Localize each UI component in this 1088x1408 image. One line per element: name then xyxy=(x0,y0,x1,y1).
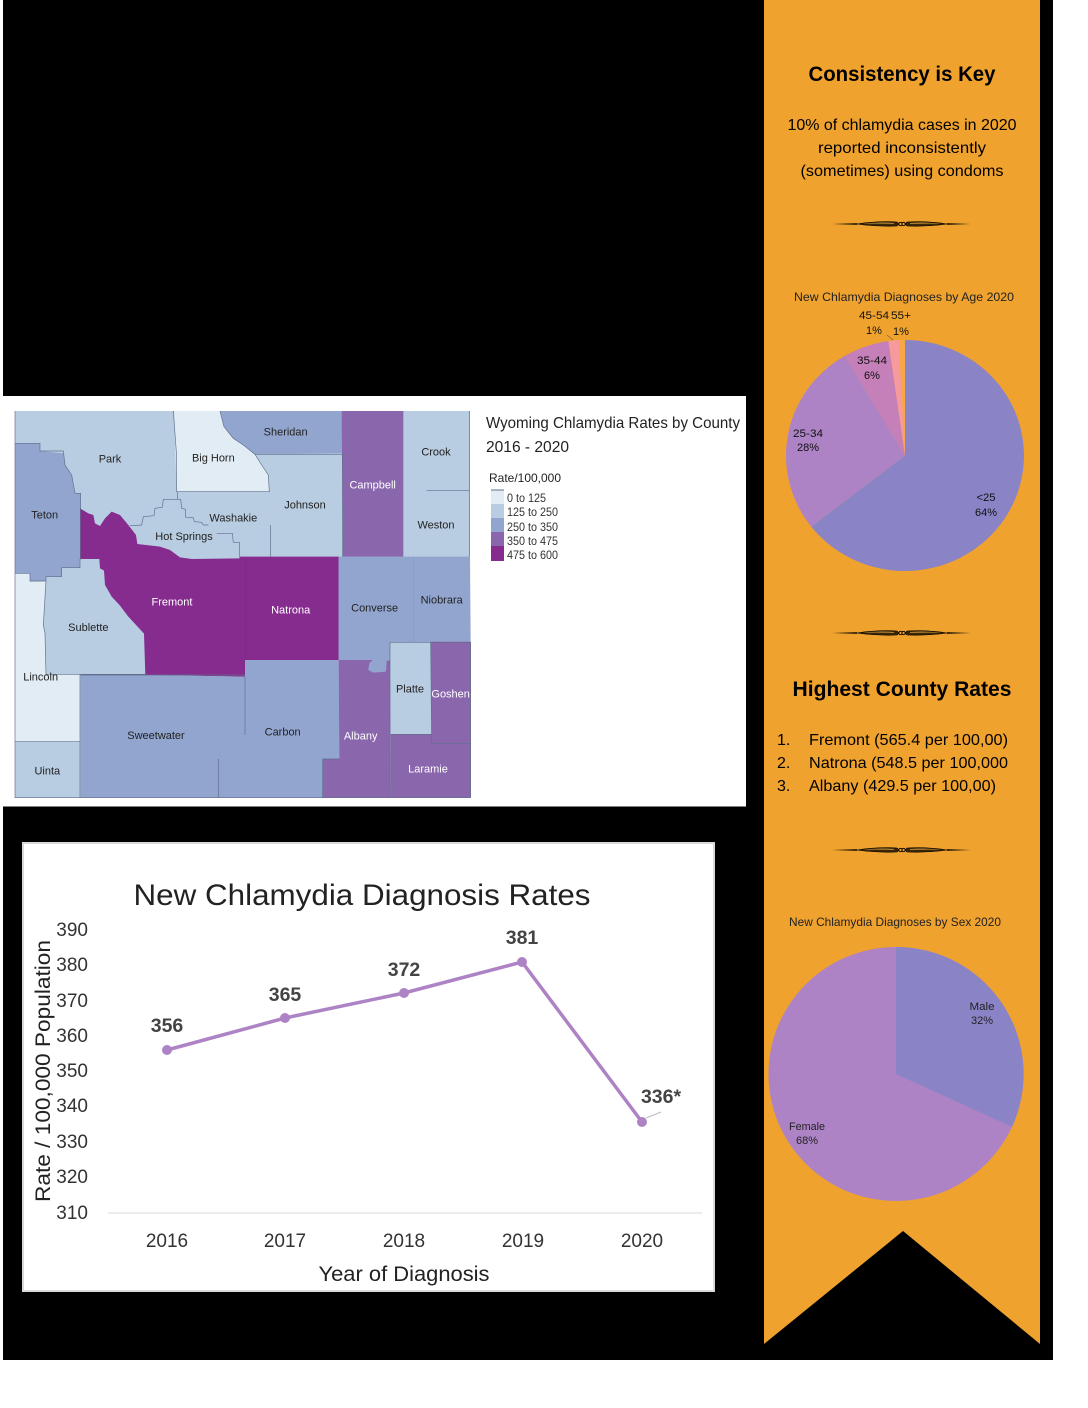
pie chart: diagnoses by age xyxy=(786,290,1024,571)
pie chart: diagnoses by age: 45-54 xyxy=(859,310,889,322)
x axis ticks: 2019 xyxy=(502,1231,544,1252)
county labels: Lincoln xyxy=(23,672,58,684)
county labels: Laramie xyxy=(408,763,448,775)
county labels: Big Horn xyxy=(192,453,235,465)
list: highest county rates: Albany (429.5 per 100,00) xyxy=(809,778,996,795)
map legend: 350 to 475 xyxy=(507,534,558,548)
x axis ticks: 2020 xyxy=(621,1231,663,1252)
x axis ticks: 2018 xyxy=(383,1231,425,1252)
y axis ticks: 360 xyxy=(56,1026,88,1047)
county labels: Park xyxy=(99,453,122,465)
map title xyxy=(486,415,740,456)
county labels: Fremont xyxy=(152,596,192,608)
data labels: 356 xyxy=(151,1015,183,1037)
pie chart: diagnoses by age: 64% xyxy=(975,507,997,519)
x axis ticks xyxy=(146,1231,663,1252)
county labels: Natrona xyxy=(271,604,311,616)
heading: Consistency is Key: Consistency is Key xyxy=(808,63,996,86)
pie chart: diagnoses by sex xyxy=(768,915,1024,1201)
y axis ticks: 390 xyxy=(56,920,88,941)
y axis label: Rate / 100,000 Population xyxy=(32,940,55,1202)
county labels: Albany xyxy=(344,730,378,742)
y axis ticks: 380 xyxy=(56,955,88,976)
map title: 2016 - 2020 xyxy=(486,439,569,456)
map legend: 250 to 350 xyxy=(507,520,558,534)
county labels: Hot Springs xyxy=(155,531,213,543)
county labels: Uinta xyxy=(35,766,61,778)
data labels: 336* xyxy=(641,1086,681,1108)
map legend: Rate/100,000 xyxy=(489,471,561,485)
list: highest county rates: 1. xyxy=(777,732,790,749)
pie chart: diagnoses by age: 35-44 xyxy=(857,355,887,367)
county labels: Sublette xyxy=(68,622,108,634)
text block: condom use xyxy=(788,117,1017,180)
county labels: Carbon xyxy=(265,726,301,738)
county labels: Converse xyxy=(351,603,398,615)
y axis ticks: 320 xyxy=(56,1167,88,1188)
panel: line chart xyxy=(23,843,714,1291)
map legend xyxy=(489,471,561,562)
pie chart: diagnoses by age: 6% xyxy=(864,370,880,382)
pie chart: diagnoses by sex: 32% xyxy=(971,1015,993,1027)
panel: orange ribbon xyxy=(764,0,1040,1344)
pie chart: diagnoses by age: 1% xyxy=(866,325,882,337)
data labels: 381 xyxy=(506,927,538,949)
map legend: 125 to 250 xyxy=(507,505,558,519)
pie chart: diagnoses by age: 28% xyxy=(797,442,819,454)
county labels: Washakie xyxy=(209,513,257,525)
y axis ticks: 310 xyxy=(56,1203,88,1224)
divider ornament 1 xyxy=(832,222,971,226)
y axis ticks: 340 xyxy=(56,1096,88,1117)
list: highest county rates: 3. xyxy=(777,778,790,795)
data labels xyxy=(151,927,681,1108)
divider ornament 3 xyxy=(832,848,971,852)
y axis ticks: 350 xyxy=(56,1061,88,1082)
list: highest county rates: Natrona (548.5 per 100,000 xyxy=(809,755,1008,772)
data line xyxy=(162,957,647,1127)
y axis ticks xyxy=(56,920,88,1224)
text block: condom use: reported inconsistently xyxy=(818,140,986,157)
pie chart: diagnoses by sex: 68% xyxy=(796,1135,818,1147)
map title: Wyoming Chlamydia Rates by County xyxy=(486,415,740,432)
list: highest county rates xyxy=(777,732,1008,795)
map of Wyoming counties xyxy=(15,411,471,798)
pie chart: diagnoses by age: 25-34 xyxy=(793,428,823,440)
x axis label: Year of Diagnosis xyxy=(318,1263,490,1286)
pie chart: diagnoses by age: <25 xyxy=(976,492,996,504)
text block: condom use: (sometimes) using condoms xyxy=(800,163,1004,180)
data labels: 372 xyxy=(388,959,420,981)
text block: condom use: 10% of chlamydia cases in 2020 xyxy=(788,117,1017,134)
county labels: Niobrara xyxy=(421,594,464,606)
county labels: Sheridan xyxy=(264,427,308,439)
y axis ticks: 330 xyxy=(56,1132,88,1153)
county borders xyxy=(15,411,471,798)
pie title: sex: New Chlamydia Diagnoses by Sex 2020 xyxy=(789,915,1001,929)
pie chart: diagnoses by age: 1% xyxy=(893,326,909,338)
county labels: Crook xyxy=(421,447,451,459)
pie chart: diagnoses by sex: Female xyxy=(789,1121,825,1133)
county labels: Goshen xyxy=(431,688,470,700)
pie title: age: New Chlamydia Diagnoses by Age 2020 xyxy=(794,290,1014,304)
county labels: Campbell xyxy=(349,479,396,491)
data labels: 365 xyxy=(269,984,301,1006)
x axis ticks: 2017 xyxy=(264,1231,306,1252)
county labels: Johnson xyxy=(284,500,326,512)
panel: county map xyxy=(3,396,746,806)
y axis ticks: 370 xyxy=(56,991,88,1012)
chart title: New Chlamydia Diagnosis Rates xyxy=(134,879,590,912)
map legend: 475 to 600 xyxy=(507,548,558,562)
county labels: Teton xyxy=(31,510,58,522)
county labels: Weston xyxy=(417,519,455,531)
list: highest county rates: 2. xyxy=(777,755,790,772)
list: highest county rates: Fremont (565.4 per 100,00) xyxy=(809,732,1008,749)
x axis ticks: 2016 xyxy=(146,1231,188,1252)
pie chart: diagnoses by sex: Male xyxy=(970,1001,994,1013)
divider ornament 2 xyxy=(832,631,971,635)
county labels xyxy=(23,427,470,778)
county labels: Sweetwater xyxy=(127,730,185,742)
pie chart: diagnoses by age: 55+ xyxy=(891,310,911,322)
map legend: 0 to 125 xyxy=(507,491,546,505)
heading: Highest County Rates: Highest County Rates xyxy=(792,678,1012,701)
county labels: Platte xyxy=(396,684,424,696)
